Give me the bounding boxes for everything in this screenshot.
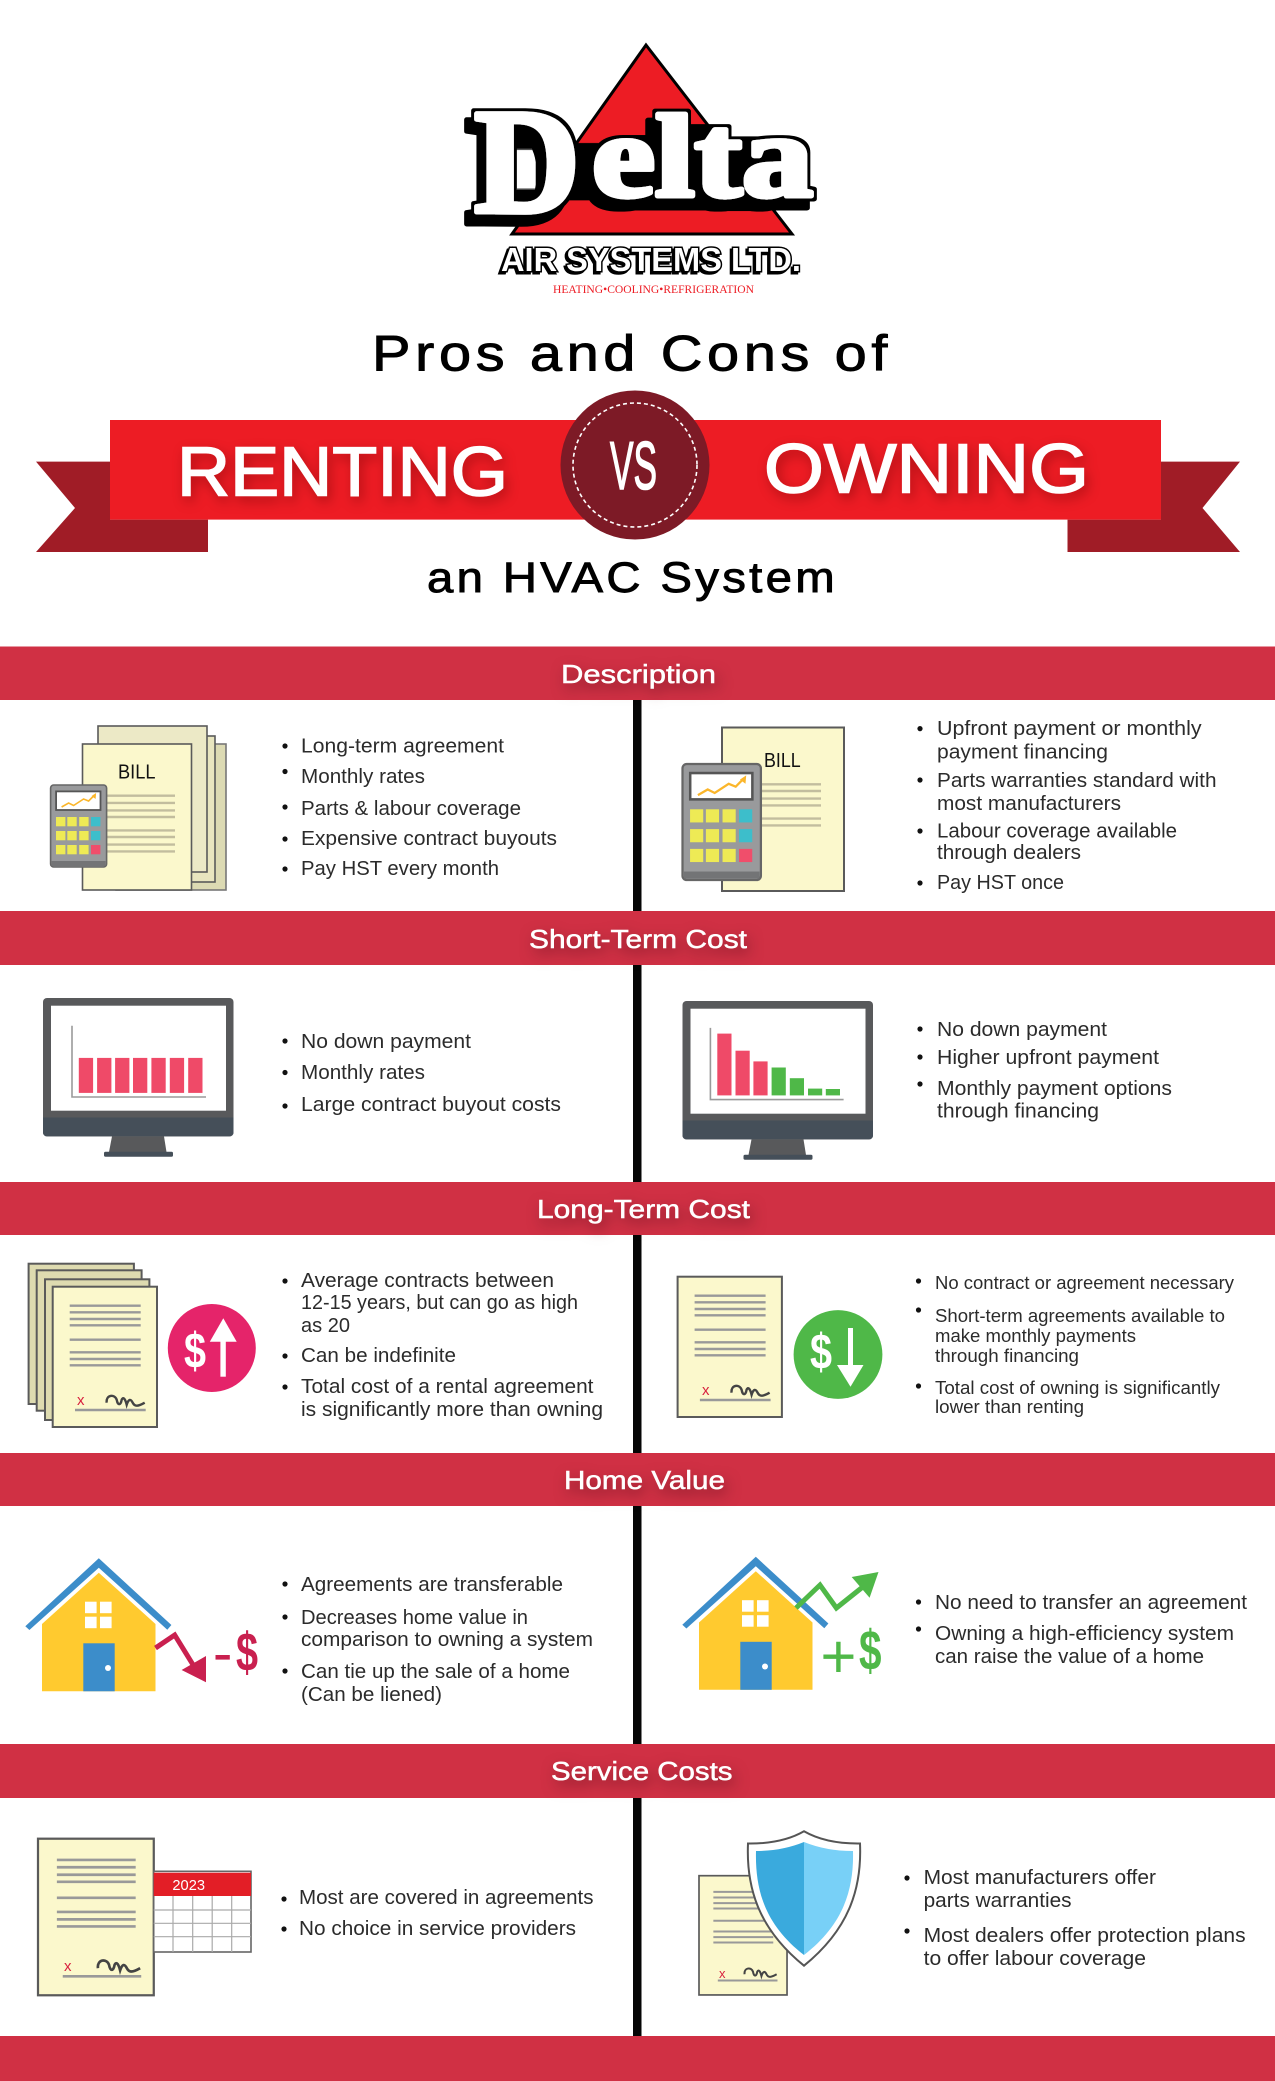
bullet list — [282, 734, 557, 880]
bullet list: Most are covered in agreements — [299, 1886, 594, 1909]
icon: house value up: $ — [859, 1619, 882, 1683]
bullet list: through dealers — [937, 841, 1081, 864]
icon: cost down circle: $ — [810, 1324, 832, 1380]
logo subtitle: AIR SYSTEMS LTD. — [501, 241, 801, 278]
panel: home value owning — [682, 1557, 1247, 1690]
logo wordmark Delta — [474, 79, 813, 245]
ribbon left tail — [36, 462, 208, 552]
bullet list: Large contract buyout costs — [301, 1093, 561, 1116]
vs badge — [560, 390, 710, 540]
panel: service costs owning — [699, 1831, 1246, 1995]
icon: house value down: $ — [236, 1621, 258, 1683]
bullet list: Pay HST every month — [301, 857, 499, 880]
bullet list: Parts warranties standard with — [937, 769, 1216, 792]
bullet list: Can tie up the sale of a home — [301, 1660, 570, 1683]
bullet list — [916, 1273, 1234, 1417]
bullet list: Expensive contract buyouts — [301, 827, 557, 850]
band: service costs: Service Costs — [551, 1756, 732, 1786]
icon: cost down circle — [794, 1310, 882, 1399]
logo wordmark Delta: D — [474, 79, 580, 245]
band: home value: Home Value — [564, 1465, 725, 1495]
bullet list: Short-term agreements available to — [935, 1306, 1225, 1326]
bullet list: can raise the value of a home — [935, 1645, 1204, 1668]
logo tagline: HEATING•COOLING•REFRIGERATION — [553, 284, 755, 296]
bullet list: Pay HST once — [937, 871, 1064, 894]
icon: bills and calculator — [51, 726, 226, 890]
bullet list: No need to transfer an agreement — [935, 1591, 1247, 1614]
bullet list: Total cost of owning is significantly — [935, 1378, 1220, 1398]
icon: bill and calculator: BILL — [764, 750, 801, 772]
band: short-term cost: Short-Term Cost — [529, 924, 748, 954]
icon: single contract — [678, 1277, 782, 1417]
icon: bill and calculator — [682, 728, 844, 891]
bullet list: No down payment — [937, 1018, 1107, 1041]
panel: long-term owning — [678, 1273, 1234, 1417]
icon: house value up — [682, 1557, 882, 1690]
panel: long-term renting — [29, 1264, 603, 1427]
band: long-term cost: Long-Term Cost — [537, 1194, 751, 1224]
panel: short-term owning — [682, 1001, 1172, 1160]
band: short-term cost — [0, 911, 1275, 965]
footer band — [0, 2036, 1275, 2081]
bullet list: comparison to owning a system — [301, 1628, 593, 1651]
bullet list: Decreases home value in — [301, 1606, 528, 1629]
text: renting: RENTING — [177, 432, 508, 510]
bullet list: No down payment — [301, 1030, 471, 1053]
bullet list — [904, 1866, 1246, 1970]
bullet list: to offer labour coverage — [924, 1947, 1146, 1970]
bullet list: as 20 — [301, 1314, 350, 1337]
bullet list: Higher upfront payment — [937, 1046, 1159, 1069]
bullet list: parts warranties — [924, 1889, 1072, 1912]
bullet list: Labour coverage available — [937, 820, 1177, 842]
icon: cost up circle — [168, 1304, 256, 1392]
center divider — [633, 700, 642, 2036]
icon: contract and shield: x — [719, 1966, 726, 1981]
bullet list — [916, 1591, 1247, 1668]
ribbon right tail — [1068, 462, 1240, 552]
icon: contract and shield — [699, 1831, 860, 1995]
bullet list: Most dealers offer protection plans — [924, 1924, 1246, 1947]
bullet list: Monthly rates — [301, 1061, 425, 1084]
panel: description owning — [682, 717, 1216, 894]
band: description — [0, 646, 1275, 700]
bullet list: Average contracts between — [301, 1269, 554, 1292]
band: long-term cost — [0, 1182, 1275, 1235]
icon: house value down — [25, 1558, 258, 1691]
calendar: 2023 — [172, 1877, 205, 1894]
bullet list: No contract or agreement necessary — [935, 1273, 1234, 1293]
band: service costs — [0, 1744, 1275, 1798]
icon: contract and calendar: x — [64, 1958, 72, 1975]
panel: description renting — [51, 726, 557, 890]
vs badge: VS — [610, 428, 657, 504]
panel: service costs renting — [38, 1839, 594, 1995]
bullet list: Parts & labour coverage — [301, 797, 521, 820]
bullet list: through financing — [937, 1100, 1099, 1122]
bullet list: Upfront payment or monthly — [937, 717, 1202, 740]
icon: stacked contracts — [29, 1264, 157, 1427]
bullet list — [282, 1269, 603, 1421]
bullet list: Owning a high-efficiency system — [935, 1622, 1234, 1645]
bullet list: No choice in service providers — [299, 1917, 576, 1940]
bullet list — [281, 1886, 594, 1940]
bullet list: Monthly payment options — [937, 1077, 1172, 1100]
bullet list: through financing — [935, 1346, 1079, 1366]
bullet list: Agreements are transferable — [301, 1573, 563, 1596]
icon: single contract: x — [702, 1382, 710, 1399]
bullet list: Monthly rates — [301, 765, 425, 788]
icon: stacked contracts: x — [77, 1392, 85, 1409]
bullet list: is significantly more than owning — [301, 1398, 603, 1421]
bullet list — [282, 1573, 593, 1706]
icon: monitor flat bar chart — [43, 998, 234, 1157]
bullet list: Total cost of a rental agreement — [301, 1375, 594, 1398]
icon: monitor falling bar chart — [682, 1001, 873, 1160]
bullet list: lower than renting — [935, 1397, 1084, 1417]
logo: Delta Air Systems — [474, 45, 813, 296]
logo wordmark Delta: elta — [592, 91, 813, 222]
bullet list: Long-term agreement — [301, 734, 504, 758]
ribbon banner — [36, 390, 1240, 552]
icon: cost up circle: $ — [184, 1323, 206, 1379]
panel: home value renting — [25, 1558, 593, 1706]
bullet list — [917, 1018, 1172, 1122]
shield — [748, 1831, 860, 1966]
bullet list: Most manufacturers offer — [924, 1866, 1156, 1889]
bullet list — [282, 1030, 561, 1116]
panel: short-term renting — [43, 998, 561, 1157]
bullet list: most manufacturers — [937, 792, 1121, 815]
text: owning: OWNING — [764, 430, 1089, 508]
bullet list: Can be indefinite — [301, 1344, 456, 1367]
band: home value — [0, 1453, 1275, 1506]
icon: bills and calculator: BILL — [118, 762, 156, 784]
calendar — [154, 1871, 251, 1952]
band: description: Description — [561, 659, 716, 689]
icon: contract and calendar — [38, 1839, 251, 1995]
title line 1: Pros and Cons of — [372, 326, 892, 382]
bullet list: make monthly payments — [935, 1326, 1136, 1346]
bullet list: 12-15 years, but can go as high — [301, 1291, 578, 1314]
bullet list: payment financing — [937, 741, 1108, 764]
ribbon main — [110, 420, 1161, 520]
title line 2: an HVAC System — [427, 554, 838, 602]
bullet list — [917, 717, 1216, 894]
bullet list: (Can be liened) — [301, 1683, 442, 1706]
